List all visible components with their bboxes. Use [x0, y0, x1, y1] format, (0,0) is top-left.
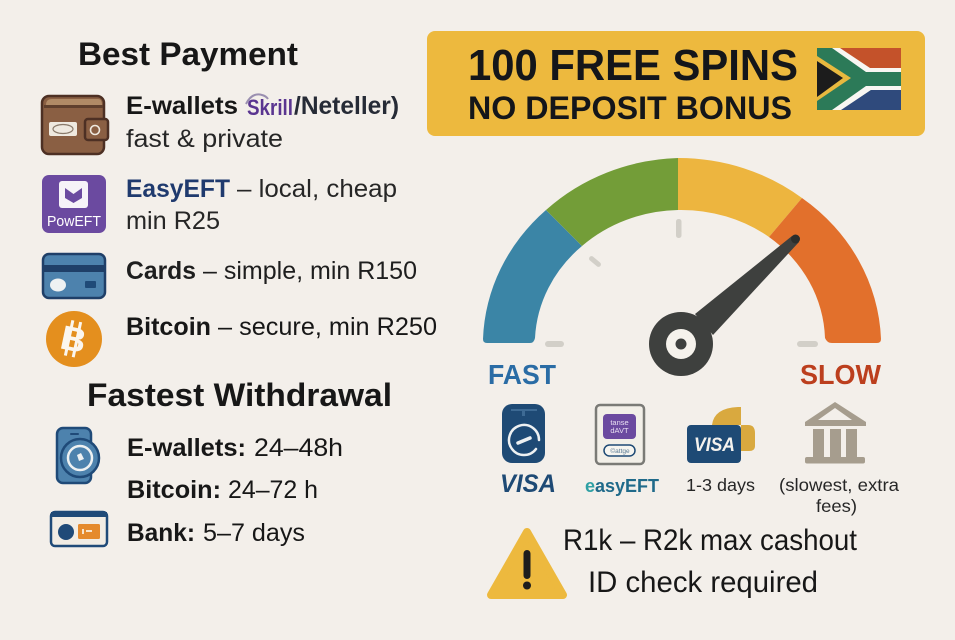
label: 1-3 days: 1-3 days	[686, 475, 755, 495]
text: cards: – simple, min R150	[203, 257, 417, 285]
heading: Fastest Withdrawal: Fastest Withdrawal	[87, 377, 392, 413]
gauge segment: green	[546, 158, 678, 246]
text: bitcoin: – secure, min R250	[218, 313, 437, 341]
gauge needle	[649, 234, 800, 376]
callout: cashout warning	[491, 524, 858, 599]
text: cards: Cards	[126, 257, 196, 285]
icon: bitcoin	[46, 311, 102, 367]
icon: VISA card	[687, 407, 755, 463]
panel: fastest withdrawal list	[51, 428, 343, 547]
text: EasyEFT: EasyEFT	[126, 175, 230, 203]
icon: EasyEFT tablet: ©attge	[610, 447, 630, 455]
chart: speed gauge	[483, 158, 882, 390]
label: slow: SLOW	[800, 359, 882, 390]
icon: EasyEFT tablet: tanse	[610, 418, 629, 427]
gauge segment: yellow	[678, 158, 802, 237]
text: bank time: 5–7 days	[203, 519, 305, 547]
text: bank time: Bank:	[127, 519, 195, 547]
label: VISA: VISA	[500, 470, 556, 498]
icon: bank card small	[51, 512, 107, 546]
text: bitcoin time: 24–72 h	[228, 476, 318, 504]
icon: warning triangle	[491, 532, 563, 595]
label: slowest extra fees: fees)	[816, 496, 857, 516]
text: e-wallets: fast & private	[126, 125, 283, 153]
icon: wallet	[42, 96, 108, 154]
banner headline: 100 FREE SPINS	[468, 41, 798, 90]
icon: bank building	[805, 402, 866, 464]
panel: method speed row	[500, 402, 899, 516]
text: bitcoin: Bitcoin	[126, 313, 211, 341]
text: bitcoin time: Bitcoin:	[127, 476, 221, 504]
text: EasyEFT: min R25	[126, 207, 220, 235]
text: e-wallets: Skrill	[247, 95, 293, 120]
text: bank time	[127, 519, 305, 547]
icon: PowEFT: PowEFT	[47, 214, 101, 230]
label: fast: FAST	[488, 359, 556, 390]
heading: Best Payment: Best Payment	[78, 36, 298, 72]
label: slowest extra fees	[779, 475, 899, 516]
icon: VISA phone	[502, 404, 545, 463]
icon: phone with clock	[57, 428, 99, 483]
panel: best payment list	[42, 92, 437, 367]
icon: PowEFT	[42, 175, 106, 233]
text: max cashout: R1k – R2k max cashout	[563, 524, 858, 557]
text: ID check: ID check required	[588, 566, 818, 599]
text: e-wallets time: 24–48h	[254, 434, 343, 462]
text: e-wallets time	[127, 434, 343, 462]
text: EasyEFT: – local, cheap	[237, 175, 397, 203]
gauge segment: blue	[483, 210, 582, 343]
text: e-wallets: E-wallets	[126, 92, 238, 120]
icon: bank card	[43, 254, 105, 298]
gauge segment: orange	[769, 198, 881, 343]
text: bitcoin time	[127, 476, 318, 504]
text: e-wallets time: E-wallets:	[127, 434, 246, 462]
icon: EasyEFT tablet	[596, 405, 644, 464]
icon: bitcoin: B	[57, 319, 89, 361]
icon: VISA card: VISA	[694, 435, 735, 456]
text: EasyEFT	[126, 175, 397, 235]
icon: EasyEFT tablet: dAVT	[610, 426, 629, 435]
gauge ticks	[545, 219, 818, 347]
text: e-wallets	[126, 92, 399, 153]
label: slowest extra fees: (slowest, extra	[779, 475, 899, 495]
text: bitcoin	[126, 313, 437, 341]
banner subheadline: NO DEPOSIT BONUS	[468, 90, 792, 126]
icon: South African flag	[817, 48, 901, 110]
banner: 100 free spins	[427, 31, 925, 136]
label: easyEFT: easyEFT	[585, 476, 659, 496]
text: e-wallets: /Neteller)	[294, 92, 399, 120]
